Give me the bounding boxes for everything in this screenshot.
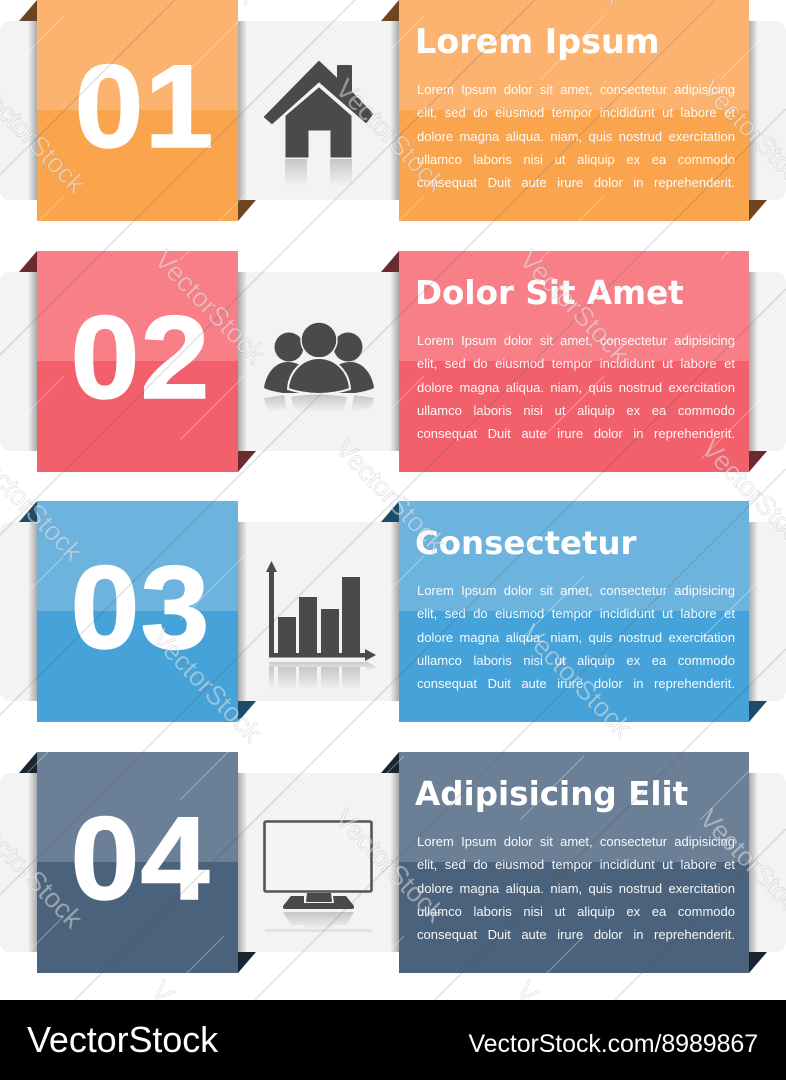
row 1: Lorem Ipsum <box>0 0 786 221</box>
number card 01 <box>37 0 238 221</box>
icon: bar chart <box>266 561 376 686</box>
watermarks: VectorStock <box>329 804 451 928</box>
paragraph: consequat Duit aute irure dolor in reprehenderit. <box>417 175 735 190</box>
paragraph: elit, sed do eiusmod tempor incididunt ut labore et <box>417 857 735 872</box>
paragraph: ullamco laboris nisi ut aliquip ex ea commodo <box>417 403 735 418</box>
paragraph: Lorem Ipsum dolor sit amet, consectetur adipisicing <box>417 583 735 598</box>
paragraph: Lorem Ipsum dolor sit amet, consectetur adipisicing <box>417 834 735 849</box>
title: Lorem Ipsum <box>415 22 660 61</box>
paragraph <box>417 333 735 441</box>
watermarks: VectorStock <box>330 434 452 558</box>
footer logo: VectorStock <box>27 1019 218 1060</box>
watermarks: VectorStock <box>516 619 638 743</box>
number 01: 01 <box>75 41 214 173</box>
watermarks: VectorStock <box>146 624 268 748</box>
paragraph: consequat Duit aute irure dolor in reprehenderit. <box>417 426 735 441</box>
number 02: 02 <box>71 292 210 424</box>
paragraph: Lorem Ipsum dolor sit amet, consectetur adipisicing <box>417 82 735 97</box>
icon: monitor <box>263 820 373 932</box>
paragraph: consequat Duit aute irure dolor in reprehenderit. <box>417 927 735 942</box>
number card 04 <box>37 752 238 973</box>
title: Consectetur <box>415 524 636 562</box>
watermarks: VectorStock <box>514 245 636 369</box>
row 3: Consectetur <box>0 501 786 722</box>
title: Dolor Sit Amet <box>415 274 684 312</box>
icon: house <box>264 61 373 181</box>
paragraph: dolore magna aliqua. niam, quis nostrud exercitation <box>417 881 735 896</box>
paragraph: Lorem Ipsum dolor sit amet, consectetur adipisicing <box>417 333 735 348</box>
number 03: 03 <box>71 542 210 674</box>
paragraph <box>417 583 735 691</box>
text card 1 <box>399 0 749 221</box>
watermarks: VectorStock <box>149 245 271 369</box>
watermarks: VectorStock <box>330 74 452 198</box>
paragraph <box>417 834 735 942</box>
number 04: 04 <box>71 793 210 925</box>
row 2: Dolor Sit Amet <box>0 251 786 472</box>
grey band <box>0 21 786 200</box>
footer bar <box>0 1000 786 1080</box>
paragraph: dolore magna aliqua. niam, quis nostrud exercitation <box>417 129 735 144</box>
paragraph: elit, sed do eiusmod tempor incididunt ut labore et <box>417 606 735 621</box>
paragraph: elit, sed do eiusmod tempor incididunt ut labore et <box>417 356 735 371</box>
paragraph: ullamco laboris nisi ut aliquip ex ea commodo <box>417 152 735 167</box>
paragraph: ullamco laboris nisi ut aliquip ex ea commodo <box>417 653 735 668</box>
paragraph: dolore magna aliqua. niam, quis nostrud exercitation <box>417 630 735 645</box>
text card 2 <box>399 251 749 472</box>
paragraph: dolore magna aliqua. niam, quis nostrud exercitation <box>417 380 735 395</box>
grey band <box>0 522 786 701</box>
row 4: Adipisicing Elit <box>0 752 786 973</box>
title: Adipisicing Elit <box>415 775 688 813</box>
icon: people <box>264 322 374 409</box>
footer url: VectorStock.com/8989867 <box>468 1030 758 1058</box>
text card 4 <box>399 752 749 973</box>
paragraph: ullamco laboris nisi ut aliquip ex ea commodo <box>417 904 735 919</box>
number card 02 <box>37 251 238 472</box>
text card 3 <box>399 501 749 722</box>
paragraph: elit, sed do eiusmod tempor incididunt ut labore et <box>417 105 735 120</box>
paragraph <box>417 82 735 190</box>
paragraph: consequat Duit aute irure dolor in reprehenderit. <box>417 676 735 691</box>
grey band <box>0 272 786 451</box>
number card 03 <box>37 501 238 722</box>
grey band <box>0 773 786 952</box>
